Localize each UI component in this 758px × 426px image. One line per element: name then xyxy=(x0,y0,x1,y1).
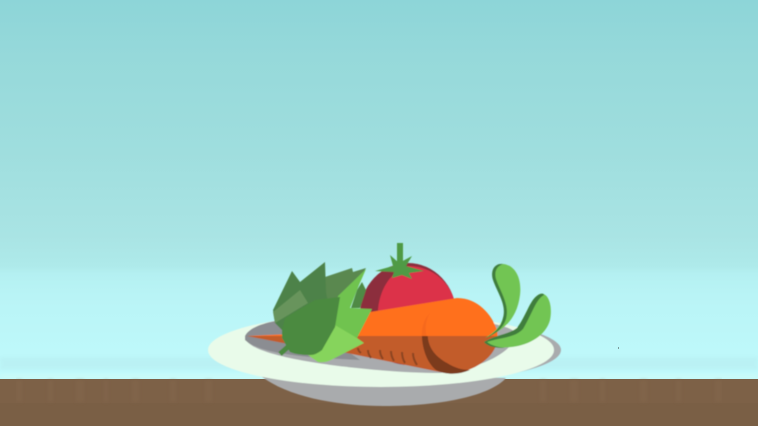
carrot xyxy=(247,264,551,374)
tomato: lit side xyxy=(378,266,456,340)
carrot: shaded lower half xyxy=(248,335,498,372)
carrot: leaf 1 xyxy=(485,264,520,338)
leafy greens xyxy=(273,262,372,362)
tomato xyxy=(360,243,456,365)
carrot: leaf 2 dark edge xyxy=(484,294,544,348)
plate: underside bowl xyxy=(256,372,506,406)
carrot: end crescent upper xyxy=(422,322,426,335)
greens: bright leaf upper xyxy=(335,269,372,338)
greens: front leaf stem xyxy=(280,345,290,354)
plate: rim xyxy=(208,313,554,387)
greens: front dark leaf xyxy=(282,297,340,355)
speck xyxy=(618,347,619,349)
greens: back left leaf xyxy=(273,262,330,335)
hazy band above table xyxy=(0,357,758,379)
tomato: stem xyxy=(397,243,403,271)
tomato: calyx star xyxy=(375,255,424,279)
carrot: leaf 1 dark edge xyxy=(486,264,507,338)
greens: small dark leaf by tomato xyxy=(351,282,366,308)
greens: back left leaf highlight xyxy=(273,290,308,323)
table xyxy=(0,379,758,426)
plate: cast shadow on rim xyxy=(215,316,561,384)
plate: inner well xyxy=(245,316,516,373)
carrot: ridges xyxy=(358,348,417,365)
tomato: shaded side xyxy=(360,263,456,365)
carrot: end crescent lower xyxy=(422,336,470,374)
carrot: leaf 2 xyxy=(484,294,551,347)
plate: inner dark shadow xyxy=(245,318,360,360)
carrot: lit upper half xyxy=(250,297,498,337)
greens: bright leaf lower xyxy=(305,325,364,362)
plate with vegetables xyxy=(208,243,561,406)
greens: back right leaf xyxy=(325,268,366,310)
